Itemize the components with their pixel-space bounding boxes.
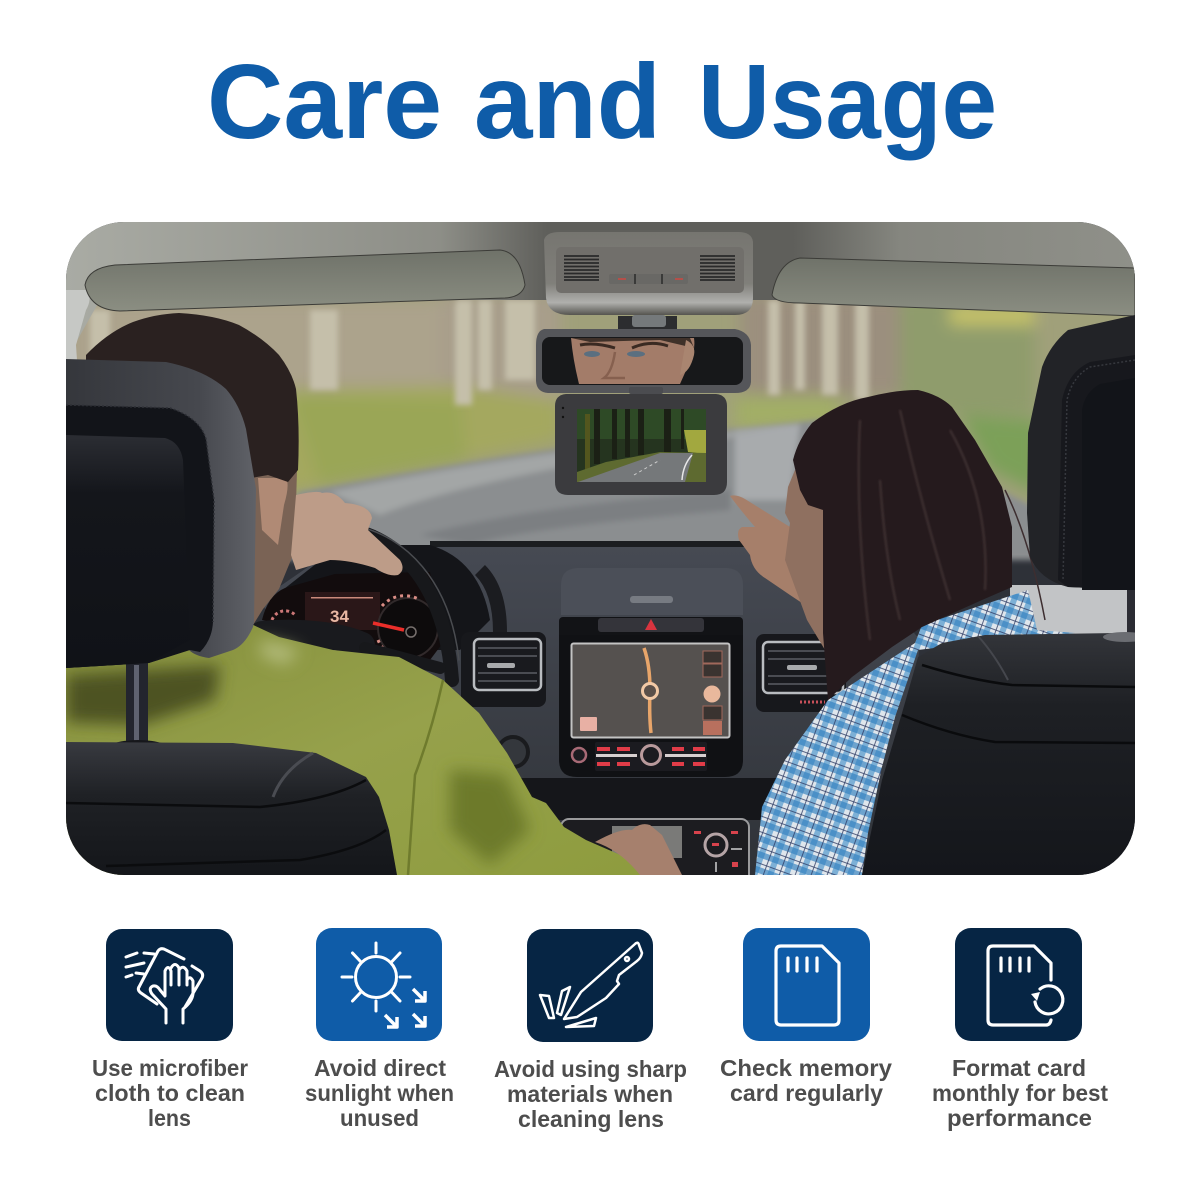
forest background through windshield xyxy=(66,295,1135,645)
title: and xyxy=(474,43,661,161)
passenger xyxy=(730,390,1075,875)
caption: memory card: card regularly xyxy=(730,1080,883,1106)
center storage lid xyxy=(561,582,743,615)
caption: format card xyxy=(932,1055,1108,1131)
caption: memory card: Check memory xyxy=(720,1055,892,1081)
icon tile: memory card xyxy=(743,928,870,1041)
caption: avoid sunlight xyxy=(305,1055,454,1131)
icon tile: format card xyxy=(955,928,1082,1041)
driver's ear xyxy=(258,478,288,545)
driver's hair xyxy=(86,313,299,482)
right sun visor xyxy=(772,258,1135,316)
caption: avoid sharp materials: materials when xyxy=(507,1081,673,1107)
left A pillar xyxy=(66,290,90,360)
caption: format card: Format card xyxy=(952,1055,1086,1081)
caption: avoid sharp materials xyxy=(494,1056,687,1132)
instrument cluster xyxy=(262,572,445,660)
caption: memory card xyxy=(720,1055,892,1106)
left sun visor xyxy=(85,250,525,311)
caption: format card: monthly for best xyxy=(932,1080,1108,1106)
caption: microfiber cloth: lens xyxy=(148,1105,191,1131)
caption: avoid sunlight: Avoid direct xyxy=(314,1055,446,1081)
caption: format card: performance xyxy=(947,1105,1092,1131)
steering wheel xyxy=(262,526,459,680)
instrument cluster: 34 xyxy=(330,607,349,626)
title: Care xyxy=(207,43,442,161)
title: Usage xyxy=(698,43,997,161)
caption: microfiber cloth xyxy=(92,1055,248,1131)
icon tile: avoid sharp materials xyxy=(527,929,653,1042)
driver's face in mirror xyxy=(571,338,694,384)
driver seat headrest xyxy=(66,359,256,764)
control panel with red buttons xyxy=(572,742,707,771)
right air vent xyxy=(756,634,846,712)
caption: microfiber cloth: Use microfiber xyxy=(92,1055,248,1081)
driver's green shirt xyxy=(66,623,643,875)
caption: avoid sharp materials: Avoid using sharp xyxy=(494,1056,687,1082)
title xyxy=(207,43,997,161)
icon tile: avoid sunlight xyxy=(316,928,442,1041)
driver's hand on wheel xyxy=(291,492,403,575)
navigation screen unit xyxy=(559,635,743,777)
roof lining xyxy=(66,222,1135,340)
passenger face xyxy=(785,470,824,649)
left air vent xyxy=(461,632,546,767)
hazard button strip xyxy=(559,617,743,635)
photo: couple in car with dash camera xyxy=(66,222,1147,889)
caption: avoid sunlight: sunlight when xyxy=(305,1080,454,1106)
rear view mirror with driver's reflection xyxy=(536,315,751,394)
overhead console xyxy=(544,232,753,315)
icon tile: microfiber cloth xyxy=(106,929,233,1041)
driver's neck and ear xyxy=(254,471,297,624)
caption: avoid sunlight: unused xyxy=(340,1105,419,1131)
dash camera xyxy=(555,394,727,495)
passenger pointing hand xyxy=(730,495,802,603)
dashboard xyxy=(260,526,920,889)
caption: microfiber cloth: cloth to clean xyxy=(95,1080,245,1106)
caption: avoid sharp materials: cleaning lens xyxy=(518,1106,664,1132)
driver's hand on console xyxy=(595,824,682,875)
passenger seat back xyxy=(862,632,1147,875)
driver xyxy=(66,313,682,875)
passenger seat headrest xyxy=(1027,315,1135,634)
driver seat back xyxy=(66,742,397,875)
passenger hair xyxy=(793,390,1012,700)
passenger plaid shirt xyxy=(755,590,1075,875)
lower console xyxy=(521,778,776,875)
road xyxy=(250,420,1040,560)
dash camera screen: forest road xyxy=(577,409,706,482)
